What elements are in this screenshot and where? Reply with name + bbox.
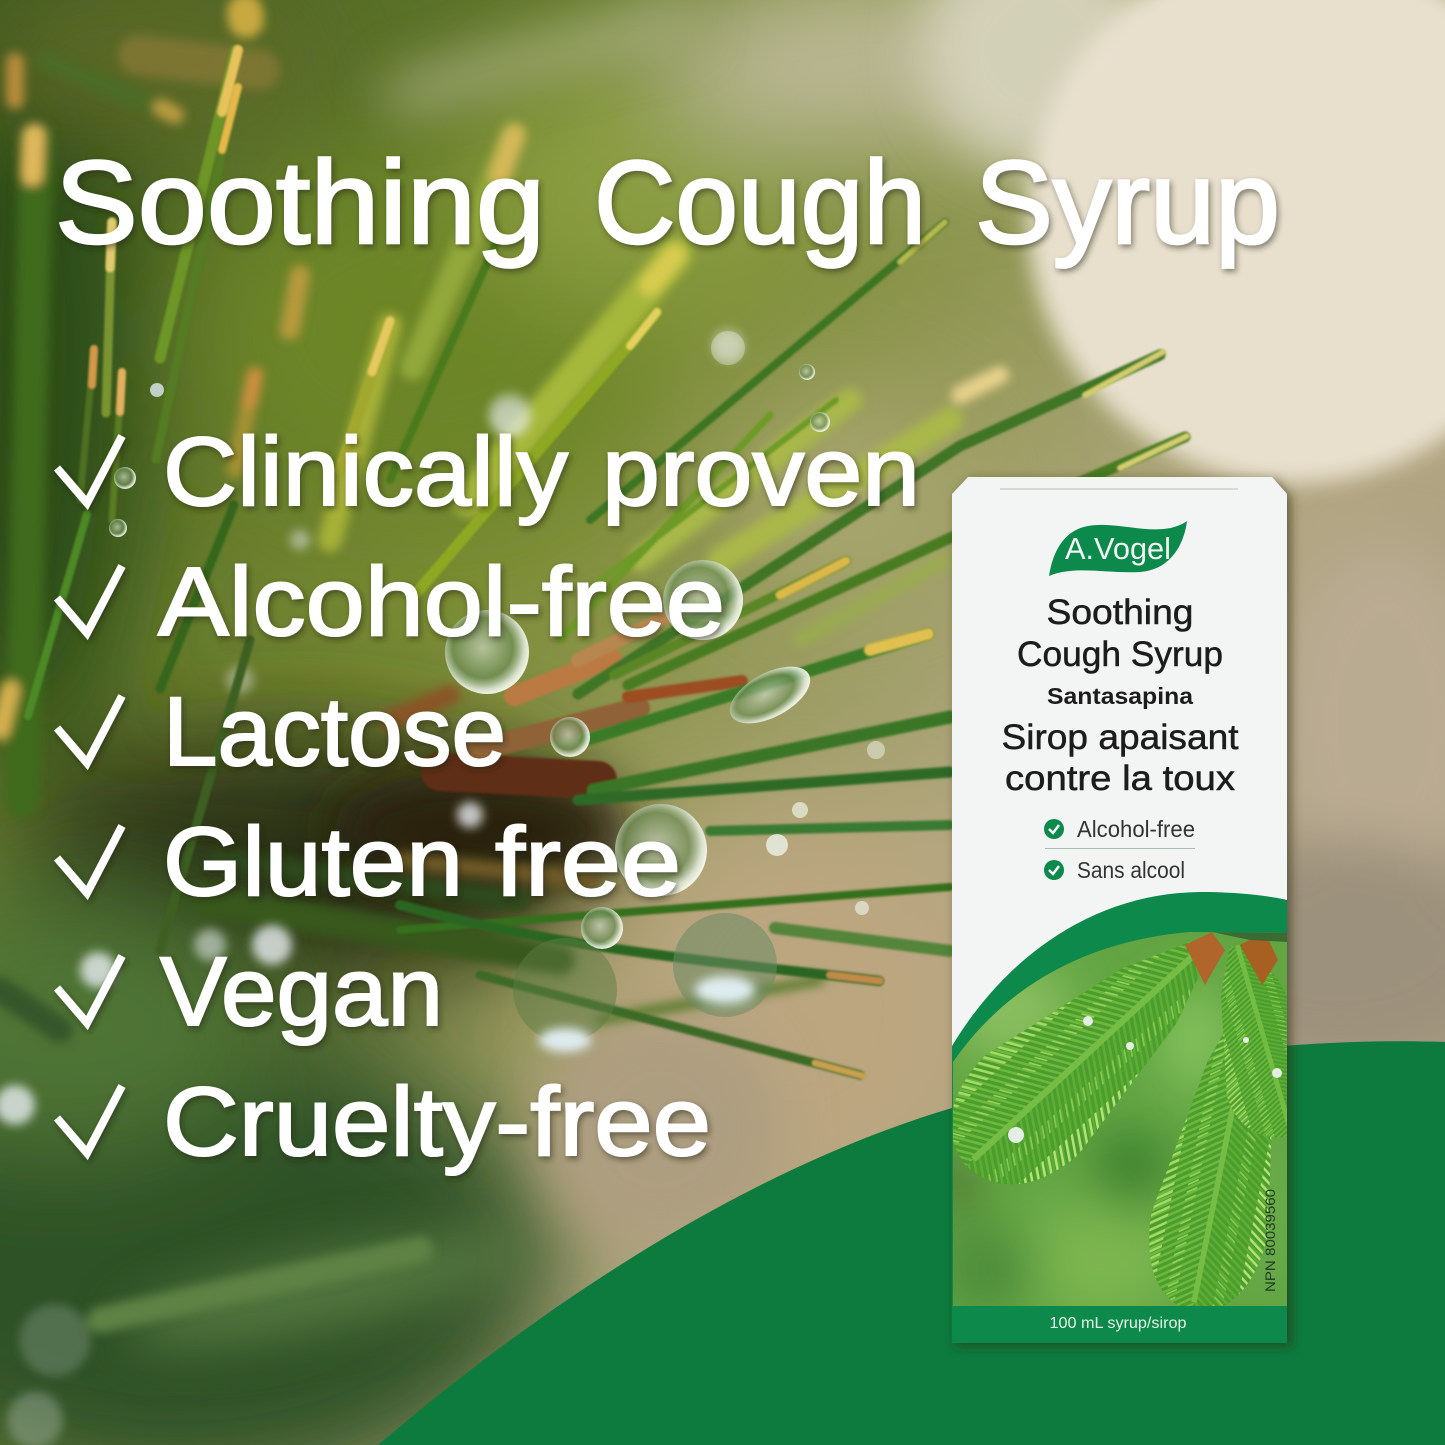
pine needles	[28, 50, 1187, 1076]
item: clinically proven: proven	[602, 417, 920, 526]
item: clinically proven: Clinically	[163, 417, 569, 526]
brown needle hub	[390, 618, 742, 780]
bokeh disc top right	[1027, 0, 1445, 483]
item: cruelty-free: Cruelty-free	[163, 1067, 711, 1176]
box claims: Sans alcool	[1077, 857, 1185, 883]
item: gluten free	[57, 807, 681, 916]
item: vegan: Vegan	[160, 937, 443, 1046]
box logo: A.Vogel leaf: A.Vogel	[1065, 531, 1171, 566]
green wave at bottom right	[378, 1041, 1445, 1445]
item: lactose: Lactose	[163, 677, 506, 786]
box claims	[1044, 816, 1195, 883]
box heading French: Sirop apaisant	[1002, 718, 1239, 757]
green needles	[28, 50, 1185, 1075]
box heading English: Soothing	[1046, 593, 1194, 632]
icon: green check	[1044, 860, 1064, 880]
box heading English: Cough Syrup	[1017, 635, 1223, 674]
item: alcohol-free: Alcohol-free	[158, 547, 725, 656]
spruce branch centre	[1149, 1034, 1272, 1306]
box heading French	[1002, 718, 1239, 798]
box top flap text	[1000, 488, 1238, 490]
title: Cough	[594, 137, 926, 269]
water droplets	[109, 331, 885, 1052]
box NPN number: NPN 80039560	[1262, 1189, 1278, 1292]
box sub-brand Santasapina: Santasapina	[1047, 683, 1193, 709]
item: clinically proven	[57, 417, 920, 526]
box volume: 100 mL syrup/sirop	[1050, 1315, 1187, 1332]
product box	[949, 472, 1298, 1352]
box claims: Alcohol-free	[1077, 816, 1195, 842]
box logo: A.Vogel leaf	[1049, 521, 1187, 576]
item: gluten free: Gluten	[163, 807, 463, 916]
item: gluten free: free	[495, 807, 681, 916]
box heading French: contre la toux	[1005, 759, 1236, 798]
bokeh highlights	[0, 329, 744, 1445]
box green arc band	[952, 892, 1287, 1343]
spruce photo	[953, 932, 1287, 1306]
spruce branch left	[953, 940, 1200, 1184]
checklist	[57, 417, 920, 1176]
title: Syrup	[975, 137, 1280, 269]
title: Soothing	[55, 137, 545, 269]
spruce branch right	[1221, 944, 1287, 1138]
out of focus needles	[0, 12, 1000, 1320]
box heading English	[1017, 593, 1223, 674]
bottom strip	[952, 1306, 1287, 1343]
water drop highlights	[1008, 1016, 1282, 1143]
icon: green check	[1044, 819, 1064, 839]
brown bud scales	[1185, 932, 1225, 985]
needle tips	[92, 50, 1187, 1076]
